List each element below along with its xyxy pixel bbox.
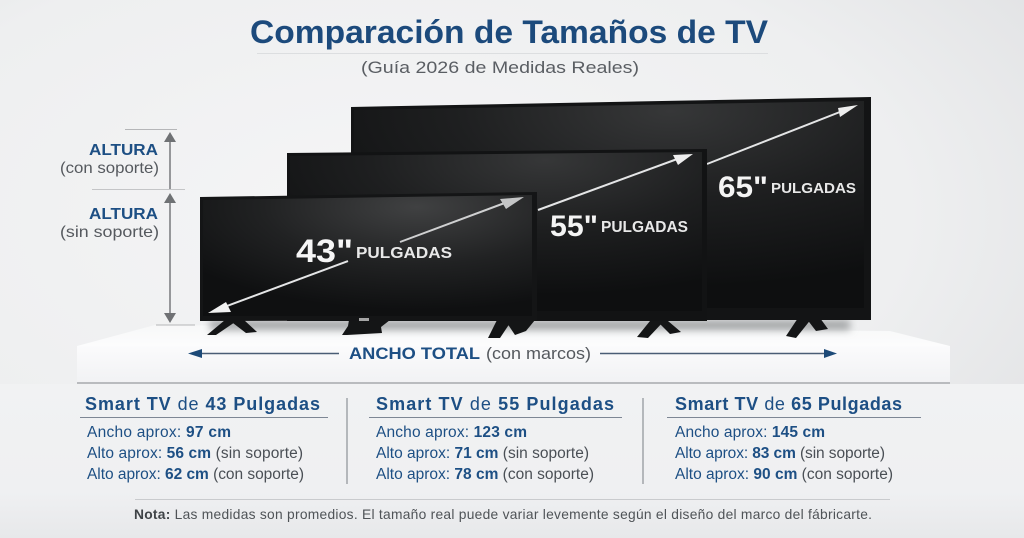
panel: 43 inch specs: [80, 394, 328, 483]
spec: width: Ancho aprox: 123 cm: [376, 424, 527, 441]
panel: 55 inch specs: [369, 394, 622, 483]
spec: height without stand: Alto aprox: 71 cm (sin soporte): [376, 445, 589, 462]
label: 55 inch: 55": [550, 210, 598, 243]
television: 65 inch: PULGADAS: [771, 180, 856, 197]
subtitle: (Guía 2026 de Medidas Reales): [361, 59, 639, 77]
total width measure: (con marcos): [486, 344, 591, 363]
panel: 65 inch specs: [667, 394, 921, 483]
stands: 43 inch: [207, 320, 535, 338]
spec: height without stand: Alto aprox: 56 cm (sin soporte): [87, 445, 303, 462]
spec: width: Ancho aprox: 97 cm: [87, 424, 231, 441]
label: height without stand: ALTURA: [89, 206, 158, 223]
television: 65 inch: [351, 97, 871, 338]
television: 43 inch: [200, 192, 537, 338]
brand mark: [359, 318, 369, 321]
diagonal arrow: 55 inch: [538, 154, 693, 210]
total width measure: [188, 344, 837, 363]
label: height without stand: (sin soporte): [60, 224, 159, 241]
diagonal arrow: 43 inch: [208, 197, 524, 313]
label: height with stand: [60, 142, 159, 177]
stand: 55 inch: [637, 321, 681, 338]
heading: 43 inch: Smart TV de 43 Pulgadas: [85, 394, 320, 414]
footnote: Nota: Las medidas son promedios. El tamaño real puede variar levemente según el diseño del marco del fábricarte.: [134, 507, 872, 522]
spec: height without stand: Alto aprox: 83 cm (sin soporte): [675, 445, 885, 462]
label: 65 inch: 65": [718, 171, 768, 204]
arrow: height without stand: [156, 193, 195, 325]
spec: height with stand: Alto aprox: 62 cm (con soporte): [87, 466, 304, 483]
heading: 65 inch: Smart TV de 65 Pulgadas: [675, 394, 902, 414]
television: 55 inch: PULGADAS: [601, 219, 688, 236]
title: Comparación de Tamaños de TV: [250, 14, 769, 50]
arrow: left: [188, 349, 339, 358]
spec: height with stand: Alto aprox: 78 cm (con soporte): [376, 466, 594, 483]
television: 55 inch: [287, 149, 707, 338]
platform: [77, 320, 950, 384]
label: height with stand: (con soporte): [60, 160, 159, 177]
label: total width: ANCHO TOTAL: [349, 344, 480, 363]
television: 43 inch: PULGADAS: [356, 245, 452, 262]
diagonal arrow: 65 inch: [707, 105, 858, 164]
spec: width: Ancho aprox: 145 cm: [675, 424, 825, 441]
arrow: right: [600, 349, 837, 358]
label: height without stand: [60, 206, 159, 241]
stand: 65 inch: [786, 318, 828, 338]
label: 43 inch: 43": [296, 233, 353, 269]
label: height with stand: ALTURA: [89, 142, 158, 159]
spec: height with stand: Alto aprox: 90 cm (con soporte): [675, 466, 893, 483]
heading: 55 inch: Smart TV de 55 Pulgadas: [376, 394, 614, 414]
arrow: height with stand: [92, 130, 185, 190]
